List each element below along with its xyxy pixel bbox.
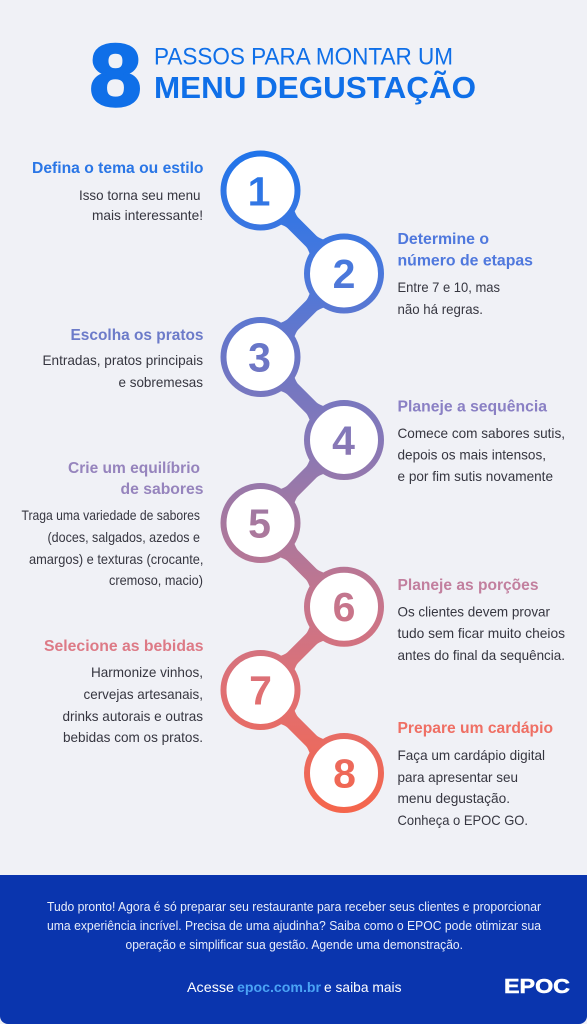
step 7 text: [44, 638, 204, 745]
banner background: [0, 875, 587, 1024]
title line 1: PASSOS PARA MONTAR UM: [154, 44, 453, 70]
step 4 text: Planeje a sequência: [398, 398, 547, 416]
step 5 text: (doces, salgados, azedos e: [48, 530, 200, 545]
step 6 text: [398, 577, 565, 663]
step numbers: 4: [332, 418, 355, 464]
step 3 text: e sobremesas: [118, 375, 203, 390]
step 7 text: cervejas artesanais,: [84, 687, 203, 702]
banner message: operação e simplificar sua gestão. Agende uma demonstração.: [126, 938, 463, 952]
step 2 text: [398, 231, 533, 317]
step 4 text: e por fim sutis novamente: [398, 469, 553, 484]
step 1 text: mais interessante!: [92, 208, 203, 223]
step 8 text: [398, 720, 553, 828]
step 1 text: Defina o tema ou estilo: [32, 160, 204, 177]
step 5 text: amargos) e texturas (crocante,: [29, 552, 204, 567]
step 7 text: bebidas com os pratos.: [63, 730, 203, 745]
banner message: uma experiência incrível. Precisa de uma ajudinha? Saiba como o EPOC pode otimizar sua: [47, 919, 542, 933]
step 2 text: Entre 7 e 10, mas: [398, 280, 500, 295]
step 5 text: cremoso, macio): [109, 573, 203, 588]
step 3 text: Escolha os pratos: [70, 327, 204, 344]
step 5 text: de sabores: [120, 481, 204, 498]
banner message: [47, 900, 542, 952]
step 7 text: Harmonize vinhos,: [91, 665, 203, 680]
step 1 text: Isso torna seu menu: [79, 188, 200, 203]
step 6 text: antes do final da sequência.: [398, 648, 565, 663]
step 6 text: Os clientes devem provar: [398, 604, 550, 620]
connectors: [278, 208, 326, 756]
step numbers: 5: [248, 500, 271, 546]
step 1 text: [32, 160, 204, 223]
title numeral 8: 8: [90, 26, 142, 124]
step circles: [224, 154, 381, 810]
call to action: [187, 979, 402, 995]
step 7 text: Selecione as bebidas: [44, 638, 204, 655]
step 4 text: Comece com sabores sutis,: [398, 426, 565, 441]
step 2 text: não há regras.: [398, 302, 483, 317]
step 4 text: depois os mais intensos,: [398, 448, 546, 462]
step 5 text: Traga uma variedade de sabores: [22, 508, 200, 523]
step numbers: [248, 168, 356, 796]
step chain: [224, 154, 381, 810]
banner message: Tudo pronto! Agora é só preparar seu restaurante para receber seus clientes e proporcionar: [47, 900, 542, 914]
step 2 text: número de etapas: [398, 252, 533, 270]
step 3 text: [42, 327, 204, 390]
step 8 text: menu degustação.: [398, 791, 510, 806]
step numbers: 1: [248, 168, 270, 214]
call to action: Acesse: [187, 979, 234, 995]
step 3 text: Entradas, pratos principais: [42, 353, 203, 368]
call to action: e saiba mais: [324, 979, 402, 995]
step numbers: 3: [248, 334, 271, 380]
step 4 text: [398, 398, 565, 484]
step 8 text: Prepare um cardápio: [398, 720, 553, 737]
step 6 text: Planeje as porções: [398, 577, 539, 594]
step 5 text: [22, 460, 204, 588]
step 8 text: Conheça o EPOC GO.: [398, 813, 528, 828]
title line 2: MENU DEGUSTAÇÃO: [154, 70, 476, 105]
step numbers: 2: [333, 251, 355, 297]
step 8 text: Faça um cardápio digital: [398, 748, 545, 763]
step numbers: 8: [333, 750, 356, 796]
step 6 text: tudo sem ficar muito cheios: [398, 626, 565, 641]
call to action: epoc.com.br: [237, 979, 322, 995]
step numbers: 7: [249, 668, 272, 714]
title: [90, 26, 476, 124]
footer banner: [0, 875, 587, 1024]
EPOC logo: EPOC: [504, 976, 570, 998]
step 7 text: drinks autorais e outras: [62, 709, 203, 724]
step numbers: 6: [333, 584, 355, 630]
step 8 text: para apresentar seu: [398, 770, 518, 785]
step 2 text: Determine o: [398, 231, 489, 248]
step 5 text: Crie um equilíbrio: [68, 460, 200, 477]
